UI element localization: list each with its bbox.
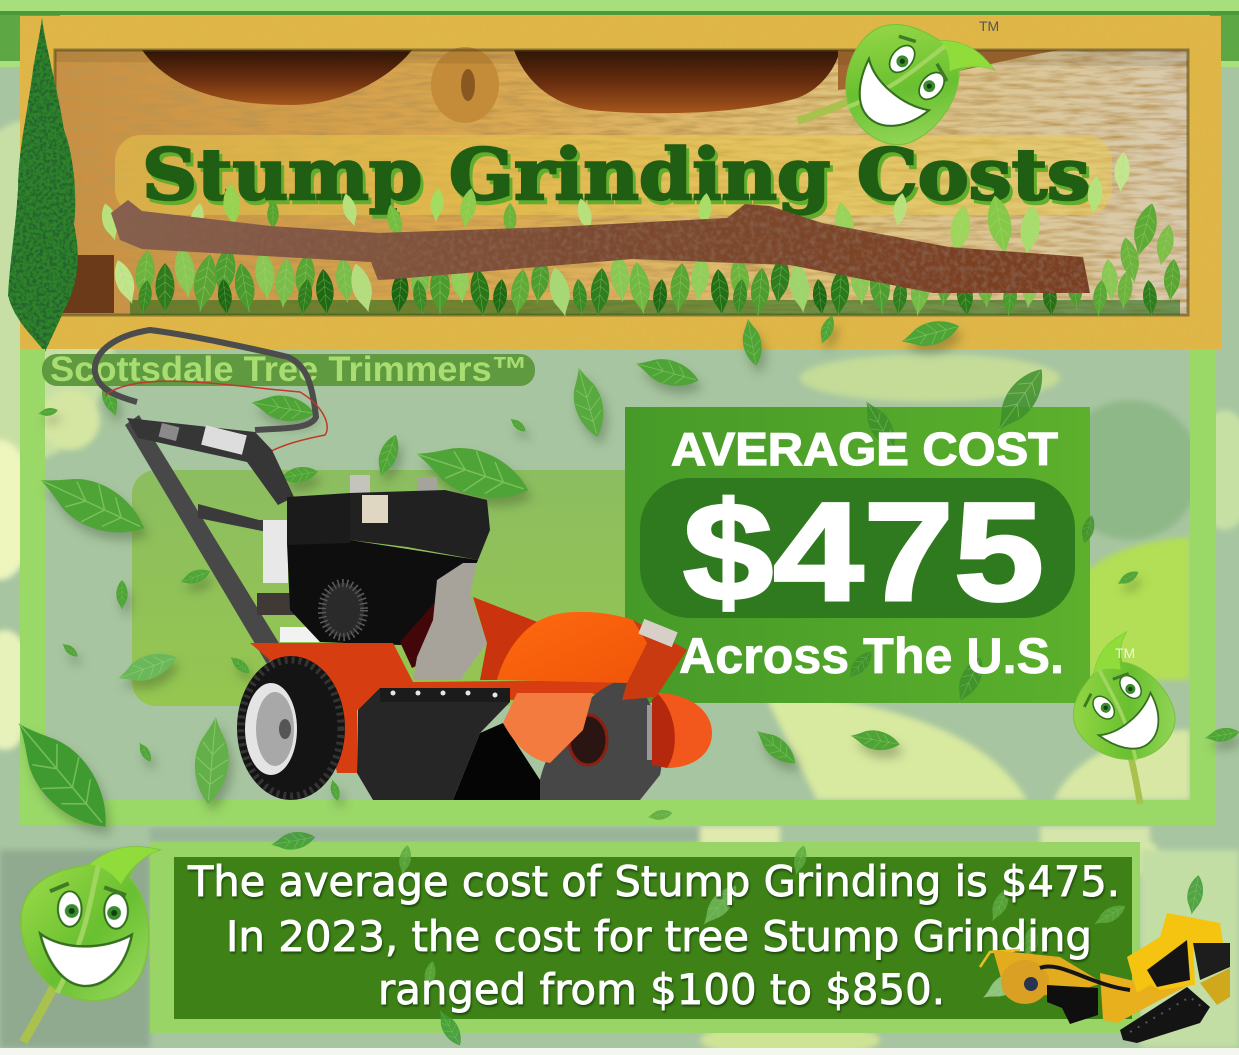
panel: summary text [21, 808, 1230, 1049]
black wedge [453, 723, 540, 800]
frame arms [125, 415, 282, 664]
wheel [237, 656, 345, 800]
drum [657, 693, 712, 768]
tree [8, 18, 78, 352]
body [1100, 973, 1193, 1023]
cab [1147, 940, 1190, 987]
dark cavity [400, 600, 437, 668]
mascot: top logo [796, 0, 996, 197]
summary lines [187, 857, 1120, 1014]
trademark: TM [979, 18, 999, 34]
gold frame [20, 16, 1221, 349]
base plate [257, 593, 305, 615]
title backing pill [115, 135, 1112, 215]
grinder arm [993, 950, 1103, 1003]
heading: AVERAGE COST [671, 423, 1058, 475]
mascot: right logo [1047, 631, 1216, 805]
yellow tracked grinder [979, 913, 1230, 1043]
panel: middle section [0, 314, 1239, 843]
guard loop [980, 950, 1020, 967]
title: Stump Grinding Costs [142, 133, 1090, 216]
blade wheel [539, 680, 662, 800]
frame [150, 842, 1140, 1033]
trademark: TM [1115, 645, 1135, 661]
arm top [1127, 913, 1223, 993]
track [1120, 987, 1210, 1043]
brand pill: Scottsdale Tree Trimmers™ [50, 350, 528, 389]
subheading: Across The U.S. [679, 628, 1064, 684]
engine [1193, 943, 1230, 980]
price: $475 [683, 473, 1044, 630]
summary lines: ranged from $100 to $850. [378, 965, 945, 1014]
engine [287, 540, 478, 645]
fuel caps [350, 475, 370, 493]
summary lines: The average cost of Stump Grinding is $475. [187, 857, 1120, 906]
hose [1040, 966, 1130, 990]
floating leaves [269, 808, 1206, 1049]
light leaves behind log [98, 151, 1182, 302]
orange guard [622, 620, 687, 700]
orange flap [503, 693, 593, 763]
inner box [174, 857, 1132, 1019]
price pill [640, 478, 1075, 618]
mascot: bottom logo [21, 847, 159, 1042]
red chassis [250, 643, 620, 773]
handle [95, 330, 316, 430]
oil tank [263, 520, 288, 583]
stabilizer [1047, 985, 1098, 1024]
inner green box [132, 470, 652, 706]
panel: wooden title board [8, 0, 1221, 352]
leaves over box [844, 361, 1097, 707]
black flap [357, 688, 510, 800]
summary lines: In 2023, the cost for tree Stump Grinding [226, 912, 1092, 961]
stump grinder machine [95, 330, 712, 800]
cost box [625, 361, 1097, 707]
rivets [390, 690, 498, 698]
frame [20, 349, 1216, 826]
grass foliage [110, 245, 1180, 318]
wood board [55, 47, 1188, 315]
floating leaves [0, 314, 1239, 843]
log branch [111, 200, 1090, 293]
pale leaf behind head [979, 964, 1031, 1006]
